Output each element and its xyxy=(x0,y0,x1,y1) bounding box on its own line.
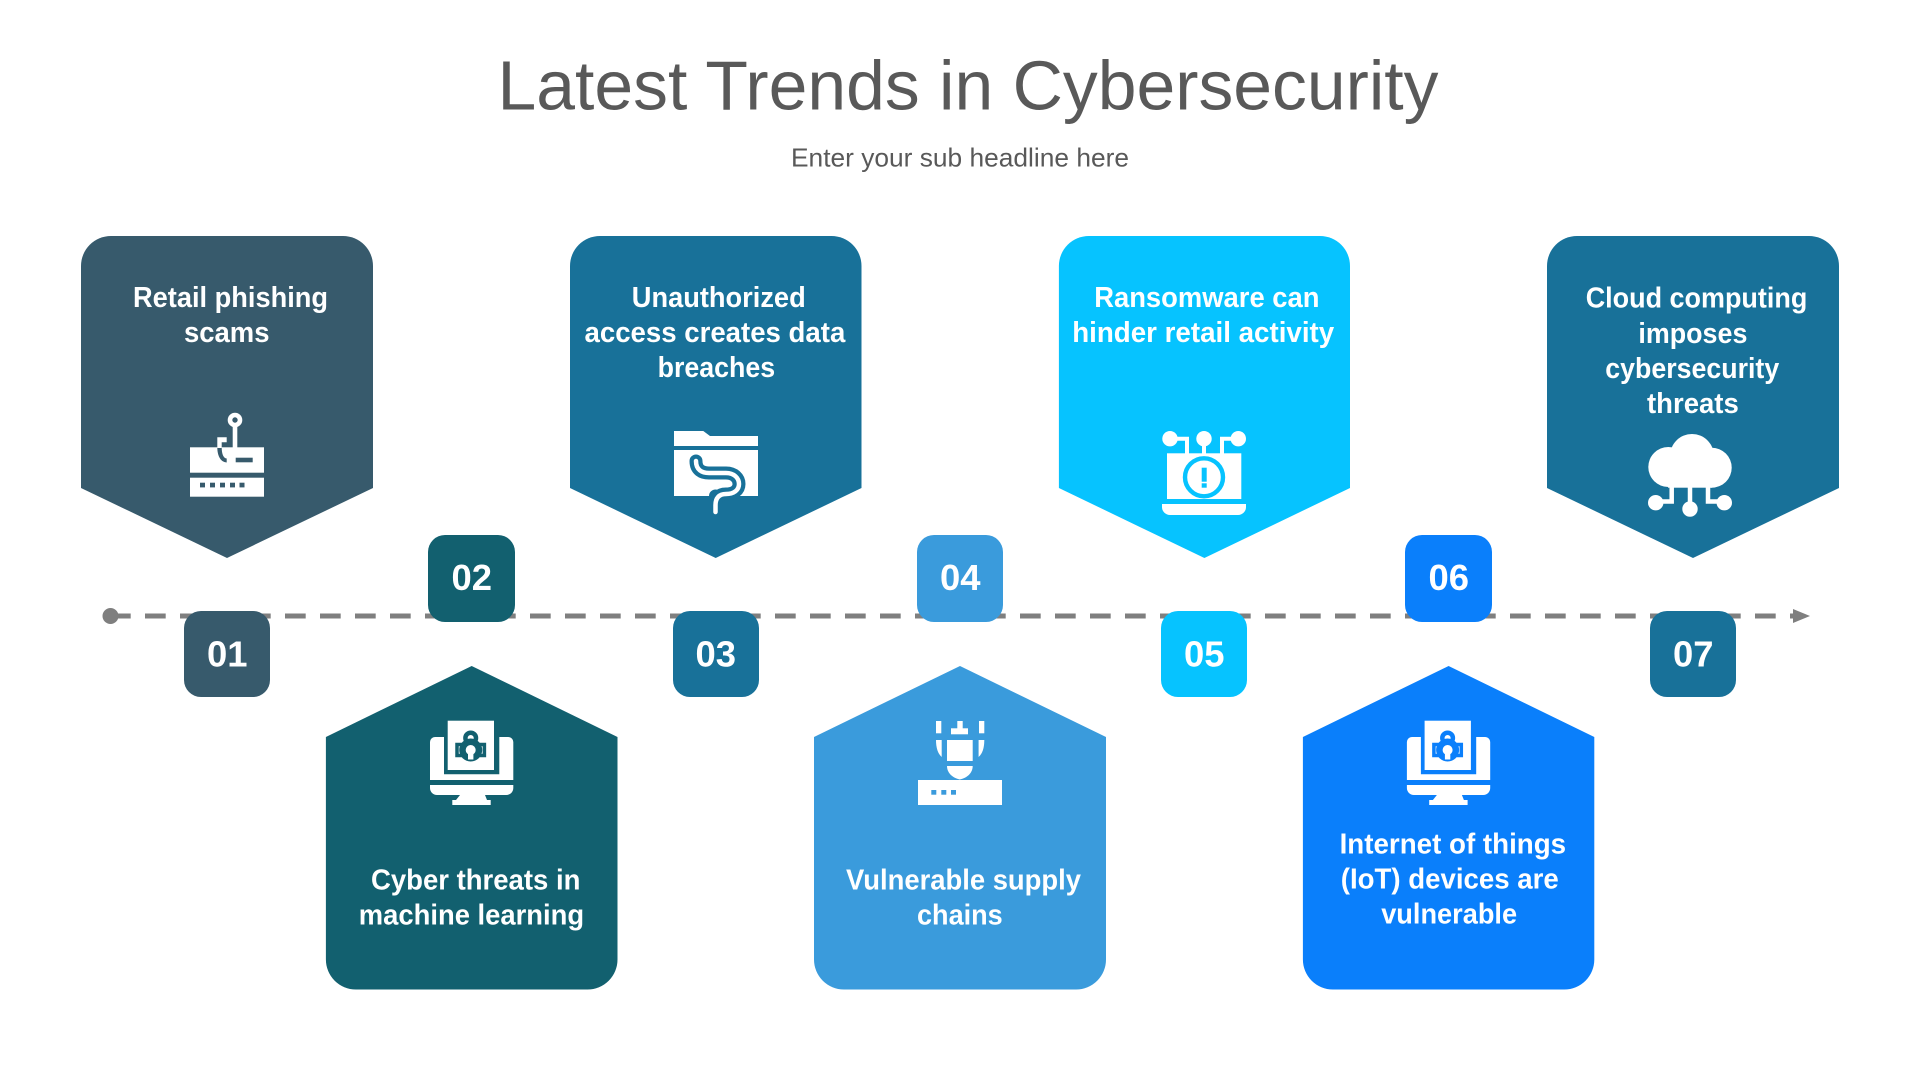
text: cloud computing: threats xyxy=(1647,388,1739,420)
title: Latest Trends in Cybersecurity xyxy=(498,46,1438,124)
badge 05 xyxy=(1161,611,1247,697)
badge 02: 02 xyxy=(452,557,492,598)
badge 03 xyxy=(673,611,759,697)
badge 07: 07 xyxy=(1673,634,1714,675)
badge 04: 04 xyxy=(940,557,980,598)
text: cloud computing: imposes xyxy=(1638,318,1747,350)
text: ransomware: Ransomware can xyxy=(1094,282,1320,314)
badge 01: 01 xyxy=(207,634,248,675)
text: iot devices: (IoT) devices are xyxy=(1341,864,1559,896)
text: cloud computing: Cloud computing xyxy=(1586,282,1807,314)
icon: folder with worm xyxy=(674,431,758,512)
text: ransomware: hinder retail activity xyxy=(1072,317,1334,349)
text: cloud computing xyxy=(1586,282,1807,420)
icon: bug on server xyxy=(918,721,1002,805)
text: cyber threats: machine learning xyxy=(359,900,584,932)
icon: cloud network xyxy=(1648,434,1732,517)
text: iot devices xyxy=(1340,828,1566,930)
icon: monitor with bug lock xyxy=(1407,721,1490,805)
text: iot devices: vulnerable xyxy=(1381,898,1517,930)
timeline arrow xyxy=(102,608,1810,624)
icon: laptop alert xyxy=(1162,431,1246,515)
badge 06 xyxy=(1405,535,1492,622)
text: unauthorized access xyxy=(584,282,846,384)
text: ransomware xyxy=(1072,282,1334,349)
panel: ransomware xyxy=(1059,236,1350,558)
text: retail phishing scams xyxy=(133,282,328,349)
text: vulnerable supply chains: chains xyxy=(917,900,1003,932)
badge 01 xyxy=(184,611,270,697)
text: vulnerable supply chains xyxy=(846,864,1081,932)
text: unauthorized access: access creates data xyxy=(584,317,846,349)
text: cyber threats: Cyber threats in xyxy=(371,864,580,896)
panel: unauthorized access xyxy=(570,236,862,558)
panel: retail phishing scams xyxy=(81,236,373,558)
panel: cloud computing xyxy=(1547,236,1839,558)
text: cloud computing: cybersecurity xyxy=(1605,353,1779,385)
text: cyber threats xyxy=(359,864,584,932)
subtitle: Enter your sub headline here xyxy=(791,142,1129,172)
icon: phishing hook xyxy=(190,415,264,497)
badge 07 xyxy=(1650,611,1736,697)
text: iot devices: Internet of things xyxy=(1340,828,1566,860)
badge 03: 03 xyxy=(696,634,736,675)
text: retail phishing scams: scams xyxy=(184,317,270,349)
panel: vulnerable supply chains xyxy=(814,666,1106,990)
badge 06: 06 xyxy=(1428,557,1469,598)
panel: cyber threats in machine learning xyxy=(326,666,618,990)
badge 04 xyxy=(917,535,1003,622)
text: vulnerable supply chains: Vulnerable supply xyxy=(846,864,1081,896)
text: retail phishing scams: Retail phishing xyxy=(133,282,328,314)
badge 05: 05 xyxy=(1184,634,1224,675)
icon: monitor with bug lock xyxy=(430,721,513,805)
text: unauthorized access: breaches xyxy=(658,352,775,384)
text: unauthorized access: Unauthorized xyxy=(632,282,806,314)
panel: iot devices xyxy=(1303,666,1594,990)
badge 02 xyxy=(428,535,515,622)
